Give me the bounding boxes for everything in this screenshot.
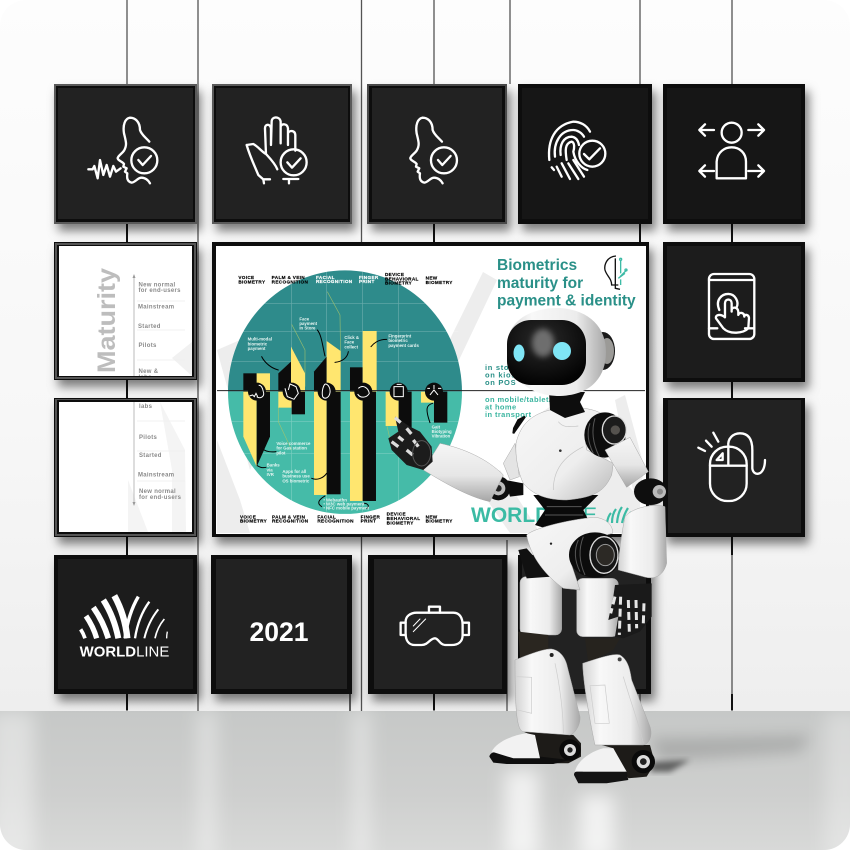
icon: lightbulb circuit (605, 256, 627, 289)
category labels bottom: BIOMETRY (240, 519, 268, 524)
robot left leg (489, 577, 581, 764)
chart annotations: collect (344, 344, 359, 349)
category labels top: RECOGNITION (272, 280, 308, 285)
axis line (217, 390, 645, 392)
panel: maturity upper axis (54, 242, 197, 381)
chart annotations: • NFC mobile payment (323, 505, 370, 510)
chart annotations: Voice commerce (276, 441, 311, 446)
category labels bottom: FINGER (361, 514, 381, 519)
chart annotations: Click & (344, 335, 359, 340)
text: physical contexts: on kiosk (485, 370, 521, 380)
chart: maturity circle (216, 270, 650, 525)
chart annotations: Fingerprint (388, 333, 412, 338)
category labels bottom: BIOMETRY (387, 520, 414, 525)
category labels bottom: PRINT (361, 519, 376, 524)
chart annotations: business use (282, 474, 310, 479)
maturity labels lower: New normal (139, 489, 176, 495)
panel: palm recognition tile (212, 84, 352, 224)
panel: maturity lower axis (54, 398, 197, 537)
text: digital contexts: at home (485, 402, 517, 412)
maturity labels (138, 282, 181, 381)
chart annotations: Gait (432, 424, 441, 429)
icon: fingerprint with check (549, 122, 605, 179)
chart annotations: • Webauthn (323, 498, 347, 503)
category labels bottom: BEHAVIORAL (387, 516, 420, 521)
category labels bottom: VOICE (240, 514, 256, 519)
chart annotations (248, 316, 452, 510)
robot hip joint (569, 532, 621, 578)
category labels top: BIOMETRY (238, 280, 266, 285)
text: physical contexts: on POS (485, 378, 516, 387)
robot torso (516, 407, 613, 500)
text: digital contexts: in transport (485, 410, 532, 419)
category labels bottom: RECOGNITION (272, 519, 309, 524)
panel: mouse tile (663, 398, 805, 537)
robot right leg (574, 578, 655, 783)
chart annotations: Apps for all (282, 469, 306, 474)
chart annotations: in Store (299, 326, 316, 331)
category labels bottom: RECOGNITION (317, 519, 354, 524)
category labels top: FACIAL (316, 275, 335, 280)
maturity labels lower: Started (139, 453, 162, 459)
maturity labels: labs (138, 375, 152, 381)
robot shoulder (584, 412, 626, 458)
bars: new biometry (421, 392, 447, 423)
maturity labels: Pilots (138, 343, 157, 349)
maturity labels: for end-users (138, 288, 181, 294)
logo: Worldline: WORLDLINE (80, 644, 169, 661)
robot waist (533, 495, 598, 533)
icon: voice with check (88, 118, 157, 183)
robot hip shell (518, 517, 613, 590)
maturity labels: New & (138, 369, 159, 375)
robot hand at side (608, 583, 652, 638)
category labels top: VOICE (238, 275, 254, 280)
logo: Worldline (80, 596, 169, 661)
panel: voice biometry tile (54, 84, 197, 224)
category labels bottom (240, 512, 453, 525)
category labels top: PRINT (359, 279, 375, 284)
chart annotations: payment (248, 346, 266, 351)
text: 2021: 2021 (250, 617, 308, 647)
maturity labels lower: labs (139, 404, 153, 410)
panel: central biometrics chart screen (212, 242, 650, 537)
panel: 2021 tile (211, 555, 352, 694)
floor shadows under robot (650, 735, 810, 772)
category labels top: FINGER (359, 275, 379, 280)
bars: voice biometry (243, 373, 270, 467)
icon: VR goggles (401, 607, 469, 645)
chart annotations: OS biometric (282, 478, 310, 483)
icon: person with arrows (699, 123, 764, 178)
maturity labels lower: New & (139, 398, 159, 404)
chart annotations: payment cards (388, 343, 419, 348)
robot far arm (486, 417, 525, 500)
chart annotations: Biotyping (432, 429, 452, 434)
title: maturity for (497, 275, 583, 292)
chart annotations: IVR (267, 472, 275, 477)
maturity labels lower: Pilots (139, 435, 157, 441)
category labels top: NEW (426, 276, 438, 281)
icon: tablet touch (709, 274, 754, 339)
category labels top: BEHAVIORAL (385, 276, 419, 281)
bars: device behavioral (386, 392, 412, 432)
category labels bottom: PALM & VEIN (272, 514, 306, 519)
maturity labels lower: for end-users (139, 495, 182, 501)
title: payment & identity (497, 292, 636, 310)
bars: facial recognition (314, 341, 341, 495)
panel: fingerprint tile (518, 84, 652, 224)
category labels top: BIOMETRY (426, 280, 453, 285)
panel: Worldline logo tile (54, 555, 197, 694)
robot head (507, 308, 615, 396)
text: digital contexts: on mobile/tablet/PC (485, 395, 563, 404)
robot upper arm (605, 437, 648, 487)
bars: palm and vein (278, 347, 305, 414)
title (497, 257, 636, 310)
panel: tablet touch tile (663, 242, 805, 382)
chart annotations: biometric (248, 341, 268, 346)
panel: device behavioral tile (663, 84, 805, 224)
chart annotations: payment (299, 321, 318, 326)
icon: face with check (410, 118, 457, 183)
category labels bottom: FACIAL (317, 514, 336, 519)
category labels bottom: DEVICE (387, 512, 406, 517)
chart annotations: Face (299, 316, 310, 321)
chart annotations: Face (344, 340, 355, 345)
title: Biometrics (497, 257, 577, 274)
chart annotations: Vibration (432, 434, 451, 439)
panel: VR tile (368, 555, 507, 694)
category labels top: DEVICE (385, 272, 404, 277)
robot neck (549, 392, 585, 418)
logo: Worldline on screen (471, 506, 631, 524)
robot elbow (634, 478, 667, 505)
floor (0, 711, 850, 850)
icon: palm with check (247, 117, 307, 183)
robot pointing arm (388, 417, 503, 502)
icon: mouse (698, 433, 765, 501)
maturity labels: New normal (138, 282, 176, 288)
chart annotations: biometric (388, 338, 408, 343)
category labels top (238, 272, 453, 286)
text: digital contexts (485, 396, 550, 418)
category labels top: BIOMETRY (385, 281, 413, 286)
category labels top: PALM & VEIN (272, 275, 305, 280)
robot forearm (618, 505, 667, 578)
robot body, hip and near arm (486, 407, 667, 590)
chart annotations: pilot (276, 450, 286, 455)
maturity labels: Mainstream (138, 304, 174, 310)
chart annotations: Banks (267, 463, 280, 468)
text: physical contexts (485, 364, 516, 385)
category labels bottom: NEW (426, 514, 438, 519)
chart annotations: Multi-modal (248, 337, 272, 342)
icons: category circles (248, 383, 443, 401)
heading: Maturity: Maturity (93, 268, 121, 373)
logo: Worldline on screen: WORLDLINE (471, 504, 597, 527)
panel: facial recognition tile (367, 84, 507, 224)
bars: fingerprint (350, 331, 377, 501)
robot illustration (388, 308, 667, 783)
maturity labels: Started (138, 324, 161, 330)
callout arrows (257, 330, 433, 509)
chart annotations: via (267, 467, 273, 472)
panel: partially hidden tile (518, 555, 651, 694)
category labels bottom: BIOMETRY (426, 519, 453, 524)
chart annotations: • W3C web payment (323, 501, 365, 506)
category labels top: RECOGNITION (316, 279, 353, 284)
maturity labels lower (138, 398, 182, 501)
text: physical contexts: in store (485, 363, 518, 372)
maturity labels lower: Mainstream (138, 472, 174, 478)
chart annotations: for Gas station (276, 446, 307, 451)
